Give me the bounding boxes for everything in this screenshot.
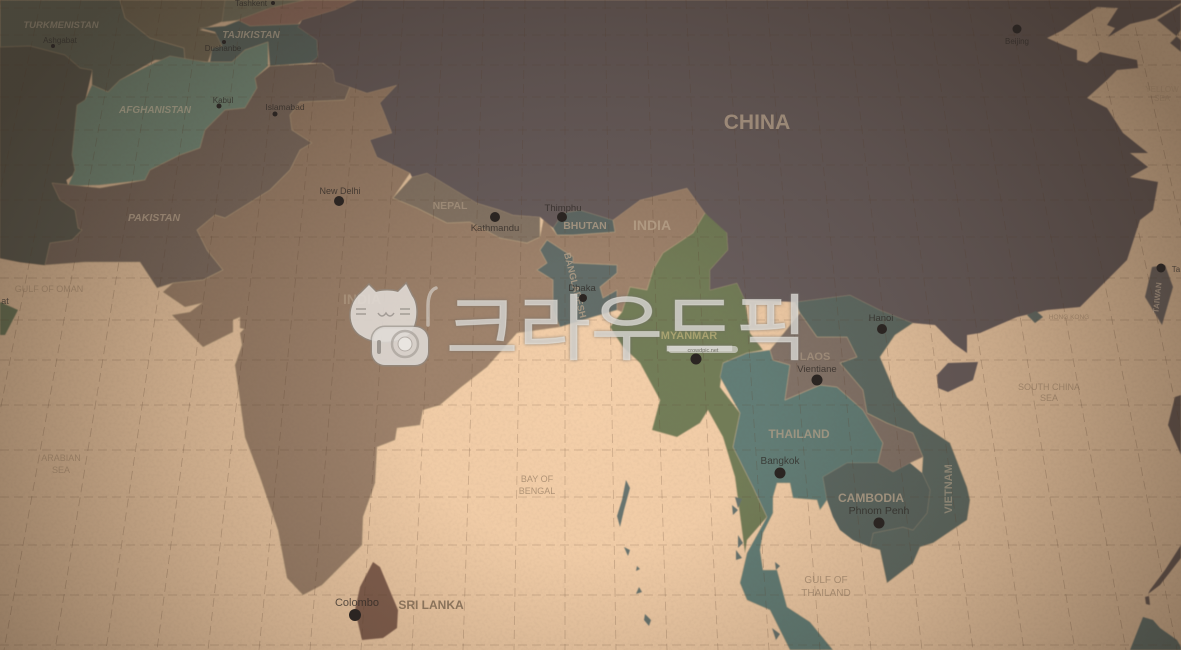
- label: India: INDIA: [343, 291, 381, 307]
- capital: Kathmandu: Kathmandu: [471, 223, 519, 234]
- label: Nepal: NEPAL: [433, 200, 468, 212]
- label: Laos: LAOS: [800, 351, 830, 363]
- country: Nepal: [393, 173, 540, 243]
- capital: Ashgabat: Ashgabat: [43, 36, 78, 45]
- country: Bangladesh: [537, 240, 617, 327]
- watermark icon: cat with camera: [351, 284, 436, 365]
- label: Arabian Sea: SEA: [52, 465, 70, 475]
- islands: Philippines: [1145, 395, 1181, 605]
- label: Bay of Bengal: BAY OF: [521, 474, 553, 484]
- capital: Islamabad: Islamabad: [265, 102, 305, 112]
- watermark wordmark: 크라우드픽: [446, 290, 808, 370]
- capital: Vientiane: Vientiane: [797, 364, 837, 375]
- country: Tajikistan: [200, 20, 318, 66]
- label: Taiwan: TAIWAN: [1151, 282, 1164, 314]
- label: Sri Lanka: SRI LANKA: [398, 598, 464, 612]
- capital: Vientiane: [797, 364, 837, 386]
- island: Hainan: [937, 362, 978, 392]
- label: Bay of Bengal: BENGAL: [519, 486, 555, 496]
- label: South China Sea: SEA: [1040, 393, 1058, 403]
- country: Bhutan: [553, 210, 615, 235]
- country: Afghanistan: [68, 42, 268, 186]
- label: Thailand: THAILAND: [768, 427, 830, 441]
- country: Turkmenistan: [0, 0, 185, 92]
- country: Kyrgyzstan: [238, 0, 357, 26]
- label: Yellow Sea: SEA: [1154, 94, 1171, 103]
- country: India: [163, 85, 705, 595]
- label: Myanmar: MYANMAR: [661, 330, 717, 342]
- country: Vietnam: [795, 295, 970, 583]
- label: Hong Kong: HONG KONG: [1049, 314, 1089, 321]
- capital: Kabul: Kabul: [213, 96, 233, 105]
- capital: Kathmandu: [471, 212, 519, 234]
- country: Iran: [0, 46, 92, 265]
- island: Taiwan: [1145, 265, 1173, 325]
- label: China: CHINA: [724, 111, 790, 134]
- capital: New Delhi: [319, 186, 361, 206]
- capital: Beijing: [1005, 24, 1029, 46]
- label: Tajikistan: TAJIKISTAN: [222, 30, 280, 41]
- label: Afghanistan: AFGHANISTAN: [118, 105, 192, 116]
- country: Thailand: [720, 350, 883, 650]
- island: Hong Kong area: [1027, 311, 1043, 323]
- country: Uzbekistan: [120, 0, 250, 62]
- capital: Thimphu: Thimphu: [545, 203, 581, 214]
- capital: Muscat fragment: at: [1, 296, 9, 306]
- label: Pakistan: PAKISTAN: [128, 212, 180, 224]
- label: Bangladesh: BANGLADESH: [561, 252, 588, 319]
- label: Bhutan: BHUTAN: [563, 220, 607, 232]
- label: Vietnam: VIETNAM: [943, 464, 955, 514]
- capital: Dushanbe: [205, 40, 242, 53]
- capital: Islamabad: [265, 102, 305, 116]
- label: Arabian Sea: ARABIAN: [41, 453, 81, 463]
- country: Kazakhstan fragment: [222, 0, 305, 22]
- watermark tagline bar: crowdpic.net: [688, 348, 719, 354]
- country: Cambodia: [823, 463, 930, 547]
- country: Laos: [770, 313, 923, 472]
- capital: Naypyidaw: [690, 354, 702, 364]
- capital: Dhaka: [568, 283, 596, 302]
- sea labels: [15, 85, 1179, 599]
- country: Myanmar: [610, 213, 767, 553]
- islands: Mergui: [732, 497, 780, 640]
- capital: New Delhi: New Delhi: [319, 186, 361, 196]
- capital: Hanoi: [869, 313, 893, 334]
- country: Korea: [1157, 5, 1181, 52]
- capital: Colombo: Colombo: [335, 597, 379, 609]
- label: South China Sea: SOUTH CHINA: [1018, 382, 1080, 392]
- capital: Colombo: [335, 597, 379, 621]
- label: Gulf of Thailand: GULF OF: [804, 575, 848, 586]
- capital: Phnom Penh: [849, 505, 910, 528]
- label: Gulf of Oman: GULF OF OMAN: [15, 284, 83, 294]
- label: Gulf of Thailand: THAILAND: [801, 588, 851, 599]
- country: Sri Lanka: [355, 562, 398, 640]
- capital: Dhaka: Dhaka: [568, 283, 596, 294]
- capital: Taipei: [1156, 264, 1181, 274]
- capital: Bangkok: Bangkok: [761, 456, 800, 467]
- islands: Andaman and Nicobar: [617, 480, 651, 626]
- label: Yellow Sea: YELLOW: [1145, 85, 1179, 94]
- island: Borneo: [1130, 617, 1181, 650]
- capital: Taipei: Ta: [1172, 265, 1181, 274]
- watermark: [351, 284, 808, 370]
- country: China: [298, 0, 1181, 353]
- capital: Phnom Penh: Phnom Penh: [849, 505, 910, 517]
- label: Cambodia: CAMBODIA: [838, 491, 904, 505]
- capital: Hanoi: Hanoi: [869, 313, 893, 324]
- label: Turkmenistan: TURKMENISTAN: [23, 20, 100, 31]
- country: Oman fragment: [0, 302, 18, 335]
- capital: Dushanbe: Dushanbe: [205, 44, 242, 53]
- capital: Bangkok: [761, 456, 800, 478]
- country: Pakistan: [45, 63, 350, 288]
- capital: Beijing: Beijing: [1005, 37, 1029, 46]
- label: India north-east: INDIA: [633, 217, 671, 233]
- capital: Thimphu: [545, 203, 581, 222]
- watermark tagline bar: [668, 346, 738, 354]
